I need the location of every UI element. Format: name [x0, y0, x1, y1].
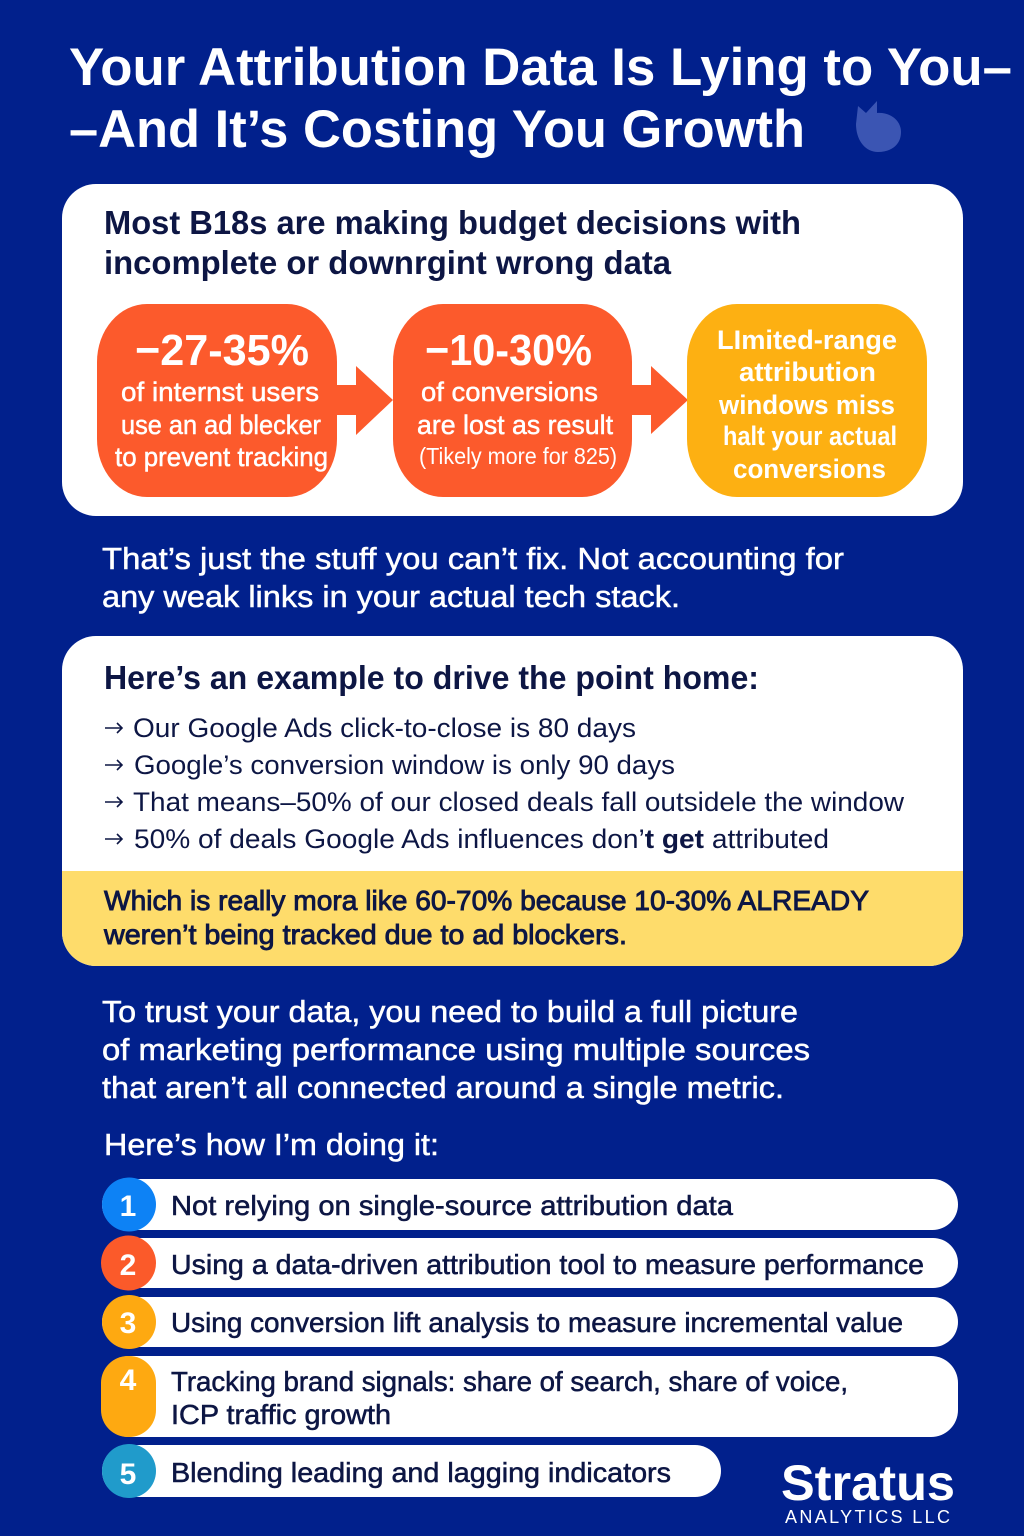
icon: faint speech blob	[856, 101, 901, 152]
arrow: first to second step	[330, 366, 393, 435]
list item 5: 5	[120, 1458, 136, 1491]
list item 4: ICP traffic growth	[171, 1399, 391, 1430]
step: limited attribution windows	[687, 304, 927, 497]
step: ad blocker users: use an ad blecker	[121, 410, 321, 440]
step: ad blocker users	[97, 304, 337, 497]
step: limited attribution windows: windows miss	[718, 390, 895, 420]
list item 1: Not relying on single-source attribution data	[171, 1190, 733, 1221]
list item 2: 2	[120, 1249, 136, 1282]
list item 1: 1	[120, 1190, 136, 1223]
text block: trust your data: To trust your data, you need to build a full picture	[102, 994, 798, 1029]
step: ad blocker users: to prevent tracking	[115, 442, 328, 472]
step: limited attribution windows: LImited-range	[717, 325, 897, 355]
panel heading: incomplete or downrgint wrong data	[104, 244, 672, 281]
list item 3	[102, 1295, 958, 1349]
step: lost conversions: (Tikely more for 825)	[419, 443, 617, 469]
step: limited attribution windows: halt your actual	[723, 421, 897, 451]
list item 2	[101, 1236, 958, 1290]
step: lost conversions	[393, 304, 632, 497]
list heading: Here’s how I’m doing it:	[104, 1127, 439, 1162]
text block: what you can't fix: any weak links in your actual tech stack.	[102, 579, 680, 614]
panel: example	[62, 636, 963, 966]
list item 1	[102, 1178, 958, 1232]
text block: trust your data: of marketing performance using multiple sources	[102, 1032, 810, 1067]
list item 3: Using conversion lift analysis to measure incremental value	[171, 1307, 903, 1338]
callout background	[62, 871, 963, 966]
title	[69, 38, 1012, 159]
list item 4: Tracking brand signals: share of search, share of voice,	[171, 1366, 848, 1397]
list item 4	[101, 1356, 958, 1437]
title: Your Attribution Data Is Lying to You–	[69, 38, 1012, 97]
title: –And It’s Costing You Growth	[69, 100, 805, 159]
list item 4: 4	[120, 1364, 137, 1397]
example list: Our Google Ads click-to-close is 80 days	[133, 713, 636, 743]
step: lost conversions: are lost as result	[417, 410, 613, 440]
logo: Stratus Analytics LLC: Stratus	[781, 1455, 955, 1511]
list item 5	[102, 1444, 721, 1498]
panel: incomplete data	[62, 184, 963, 516]
example heading: Here’s an example to drive the point home:	[104, 659, 759, 696]
callout text: Which is really mora like 60-70% because 10-30% ALREADY	[104, 885, 869, 916]
example list: That means–50% of our closed deals fall outsidele the window	[133, 787, 905, 817]
list item 3: 3	[120, 1307, 136, 1340]
list item 2: Using a data-driven attribution tool to measure performance	[171, 1249, 924, 1280]
step: limited attribution windows: attribution	[739, 357, 876, 387]
text block: trust your data: that aren’t all connected around a single metric.	[102, 1070, 784, 1105]
logo: Stratus Analytics LLC: ANALYTICS LLC	[785, 1507, 950, 1527]
text block: what you can't fix: That’s just the stuff you can’t fix. Not accounting for	[102, 541, 844, 576]
panel heading	[104, 204, 801, 281]
text block: what you can't fix	[102, 541, 844, 614]
arrow: second to third step	[625, 366, 688, 434]
example list: Google’s conversion window is only 90 days	[134, 750, 675, 780]
example list	[105, 713, 905, 854]
list item 5: Blending leading and lagging indicators	[171, 1457, 671, 1488]
callout text: weren’t being tracked due to ad blockers.	[103, 919, 627, 950]
callout text	[103, 885, 869, 950]
text block: trust your data	[102, 994, 810, 1105]
panel heading: Most B18s are making budget decisions with	[104, 204, 801, 241]
step: ad blocker users: of internst users	[121, 377, 319, 407]
step: ad blocker users: −27-35%	[135, 326, 309, 375]
step: limited attribution windows: conversions	[733, 454, 886, 484]
step: lost conversions: of conversions	[421, 377, 598, 407]
example list: 50% of deals Google Ads influences don’ t get attributed	[134, 824, 829, 854]
step: lost conversions: −10-30%	[425, 326, 592, 375]
